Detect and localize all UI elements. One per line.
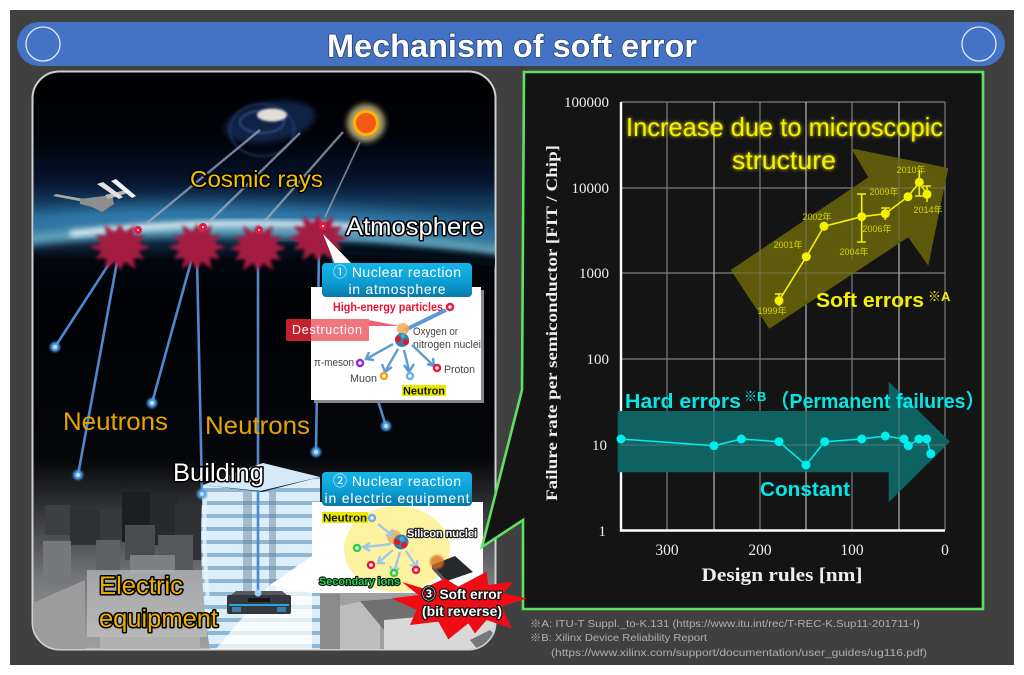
year labels: [757, 164, 943, 316]
label: neutron: [402, 373, 446, 398]
year labels: 2002年: [802, 211, 832, 222]
label: cosmic rays: Cosmic rays: [190, 166, 323, 192]
icon: chip: [430, 555, 473, 585]
callout: soft error star: (bit reverse): [422, 603, 502, 619]
building: [201, 463, 320, 650]
label: muon: Muon: [350, 373, 377, 385]
heading: increase due to microscopic structure: structure: [732, 145, 836, 175]
cosmic ray beams: [147, 130, 360, 223]
label: soft errors: ※A: [928, 289, 951, 304]
label: silicon nuclei: Silicon nuclei: [407, 528, 477, 540]
label: constant: Constant: [760, 479, 850, 501]
label: neutrons left: Neutrons: [63, 408, 168, 436]
title bar: [17, 22, 1005, 66]
reaction product arrows: [366, 344, 434, 372]
footnotes: [530, 618, 927, 659]
secondary ion markers: [354, 545, 419, 576]
panel: nuclear reaction in electric equipment: [312, 472, 483, 593]
callout pointer: atmosphere reaction: [323, 234, 352, 264]
x axis tick labels: 0: [941, 542, 949, 559]
neutron beams: [55, 245, 386, 494]
year labels: 2014年: [913, 204, 943, 215]
earth horizon: [20, 216, 510, 262]
reaction arrows: [363, 524, 417, 573]
icon: sun: [347, 104, 385, 142]
neutron end points: [50, 342, 391, 480]
x axis tick labels: [655, 542, 949, 559]
callout: soft error star: [392, 572, 527, 639]
y axis tick labels: 1000: [579, 266, 609, 282]
label: neutron: Neutron: [323, 512, 367, 524]
label: neutrons right: Neutrons: [205, 412, 310, 440]
x axis tick labels: 100: [840, 542, 864, 559]
nuclear reaction bursts: [90, 215, 348, 271]
label: hard errors: [625, 389, 985, 413]
callout: soft error star: ③ Soft error: [422, 586, 503, 602]
chart axes: [621, 102, 945, 530]
label: secondary ions: Secondary ions: [319, 576, 400, 588]
particle markers: [136, 224, 326, 232]
y axis tick labels: [564, 95, 609, 540]
y axis tick labels: 100000: [564, 95, 609, 111]
y axis tick labels: 10: [592, 438, 607, 454]
heading: reaction 2: ② Nuclear reaction: [333, 473, 461, 489]
label: hard errors: ※B: [744, 389, 766, 404]
heading: reaction 2: [322, 472, 472, 506]
heading: increase due to microscopic structure: [626, 112, 943, 175]
y axis title: Failure rate per semiconductor [FIT / Chip]: [544, 145, 561, 501]
label: pi-meson: π-meson: [314, 357, 354, 369]
soft error trend arrow: [731, 148, 948, 329]
year labels: 2004年: [839, 246, 869, 257]
soft error series: [774, 170, 932, 306]
footnotes: ※B: Xilinx Device Reliability Report: [530, 632, 707, 644]
x axis tick labels: 200: [748, 542, 772, 559]
year labels: 2010年: [896, 164, 926, 175]
label: atmosphere: Atmosphere: [346, 213, 484, 241]
label: soft errors: Soft errors: [816, 290, 924, 312]
hard error trend arrow: [618, 382, 950, 502]
chart gridlines: [621, 102, 945, 530]
label: oxygen or nitrogen nuclei: Oxygen or: [413, 326, 458, 338]
x axis title: Design rules [nm]: [702, 565, 862, 586]
city: [33, 492, 207, 651]
icon: incoming particle: [405, 304, 453, 330]
icon: silicon nucleus: [387, 530, 408, 550]
label: electric equipment: [99, 572, 218, 633]
building neutron point: [197, 489, 207, 499]
hard error series: [616, 432, 935, 470]
icon: space station: [53, 179, 136, 212]
icon: galaxy: [221, 94, 319, 156]
footnotes: ※A: ITU-T Suppl._to-K.131 (https://www.itu.int/rec/T-REC-K.Sup11-201711-I): [530, 618, 920, 630]
neighbouring gray buildings: [320, 593, 495, 649]
label: proton: Proton: [444, 364, 475, 376]
yellow reaction zone: [344, 506, 450, 592]
x axis tick labels: 300: [655, 542, 679, 559]
heading: reaction 2: in electric equipment: [324, 490, 470, 506]
label: electric equipment: Electric: [99, 572, 183, 600]
icon: nucleus: [395, 323, 409, 347]
panel: failure rate chart: [482, 72, 985, 609]
heading: reaction 1: in atmosphere: [348, 281, 446, 297]
year labels: 2001年: [773, 239, 803, 250]
icon: left ring: [26, 27, 60, 61]
y axis tick labels: 1: [598, 524, 606, 540]
footnotes: (https://www.xilinx.com/support/documentation/user_guides/ug116.pdf): [551, 647, 927, 659]
year labels: 2009年: [869, 186, 899, 197]
title: Mechanism of soft error: [327, 28, 697, 64]
panel: nuclear reaction in atmosphere: [286, 263, 484, 403]
label: nitrogen nuclei: nitrogen nuclei: [413, 339, 481, 351]
label: neutron: Neutron: [403, 386, 445, 398]
year labels: 1999年: [757, 305, 787, 316]
callout: destruction: Destruction: [292, 323, 362, 337]
icon: electric equipment: [227, 490, 291, 614]
callout: destruction: [286, 319, 400, 341]
panel: cosmic ray illustration: [20, 72, 510, 652]
label: hard errors: （Permanent failures）: [770, 390, 985, 413]
label: hard errors: Hard errors: [625, 391, 741, 413]
y axis tick labels: 10000: [572, 181, 609, 197]
heading: reaction 1: ① Nuclear reaction: [333, 264, 461, 280]
label: electric equipment: equipment: [99, 605, 218, 633]
heading: increase due to microscopic structure: Increase due to microscopic: [626, 112, 943, 142]
heading: reaction 1: [322, 263, 472, 297]
label: high-energy particles: High-energy particles: [333, 302, 443, 314]
label: building: Building: [173, 459, 264, 487]
gridlines over arrows: [621, 150, 945, 492]
icon: right ring: [962, 27, 996, 61]
y axis tick labels: 100: [586, 352, 609, 368]
year labels: 2006年: [862, 223, 892, 234]
